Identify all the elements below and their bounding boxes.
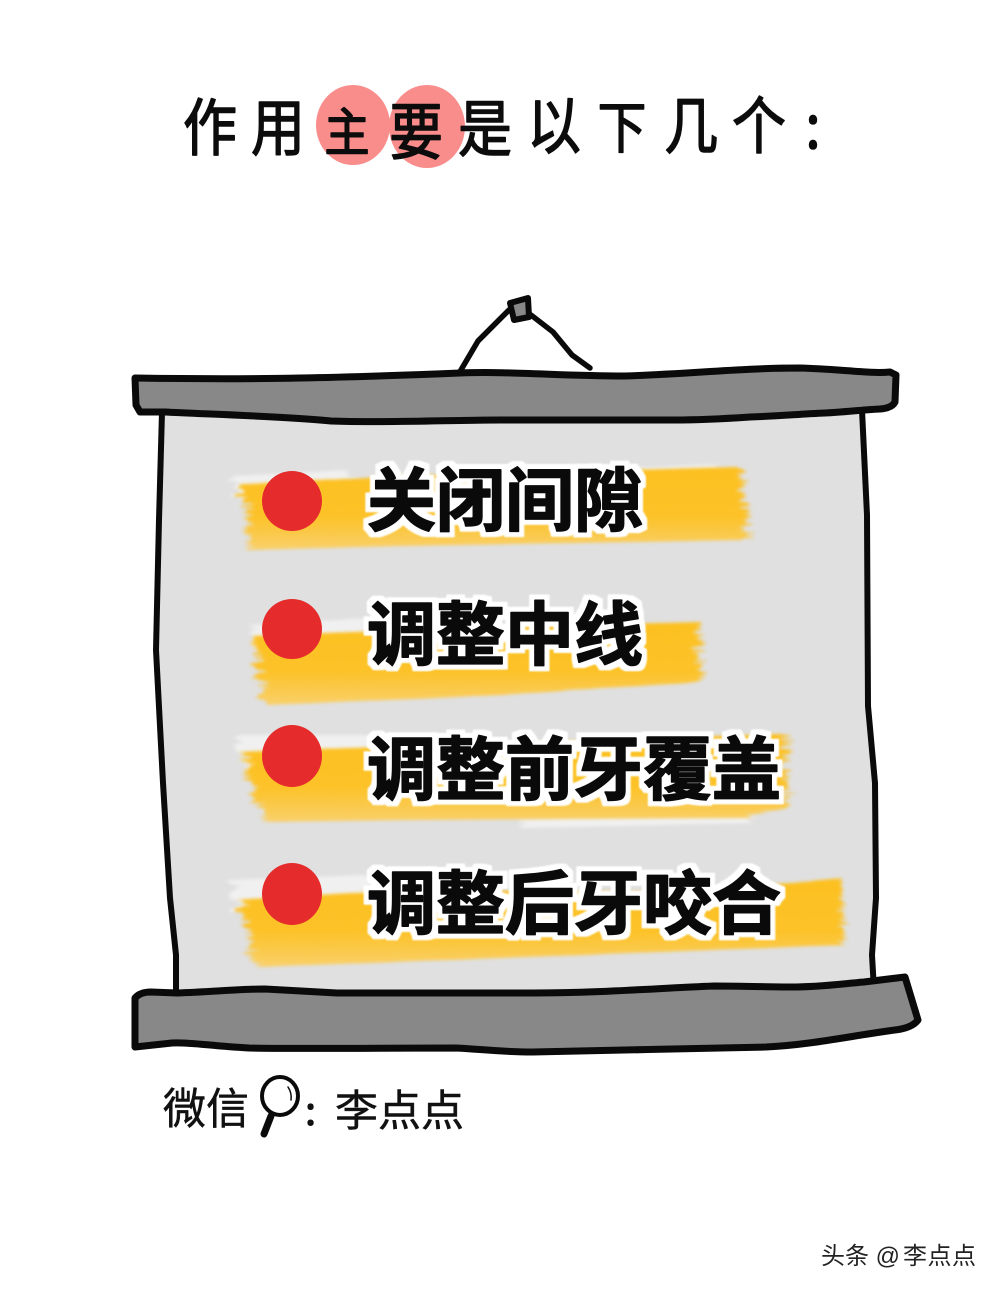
title text: 用 <box>251 79 305 168</box>
title text: 是 <box>458 80 512 169</box>
bottom roller <box>135 977 918 1052</box>
brush strokes <box>238 467 844 967</box>
title text: 以 <box>527 77 581 166</box>
list labels: 关闭间隙 <box>367 445 643 545</box>
list labels: 调整中线 <box>367 579 643 679</box>
wechat credit <box>163 1075 464 1139</box>
list labels: 调整后牙咬合 <box>367 848 781 948</box>
watermark: 头条 @李点点 <box>821 1243 976 1270</box>
title text: 下 <box>598 84 646 165</box>
scroll hanger <box>458 298 590 375</box>
wechat credit: 微信 <box>163 1075 249 1137</box>
brush white streaks <box>232 464 750 912</box>
title text: 主 <box>324 91 370 167</box>
title text: : <box>806 77 821 166</box>
title text: 个 <box>732 77 786 166</box>
title highlight circles <box>316 85 465 168</box>
list labels <box>367 445 781 948</box>
icon: magnifier <box>262 1077 298 1134</box>
wechat credit: : <box>305 1079 316 1137</box>
wechat credit: 李点点 <box>335 1077 464 1139</box>
title text: 几 <box>664 77 718 166</box>
top roller <box>135 368 896 422</box>
scroll panel <box>156 410 876 998</box>
list labels: 调整前牙覆盖 <box>367 714 781 814</box>
title text: 作 <box>183 79 237 168</box>
red bullets <box>262 471 322 925</box>
title text: 要 <box>389 83 443 172</box>
title <box>183 77 821 172</box>
